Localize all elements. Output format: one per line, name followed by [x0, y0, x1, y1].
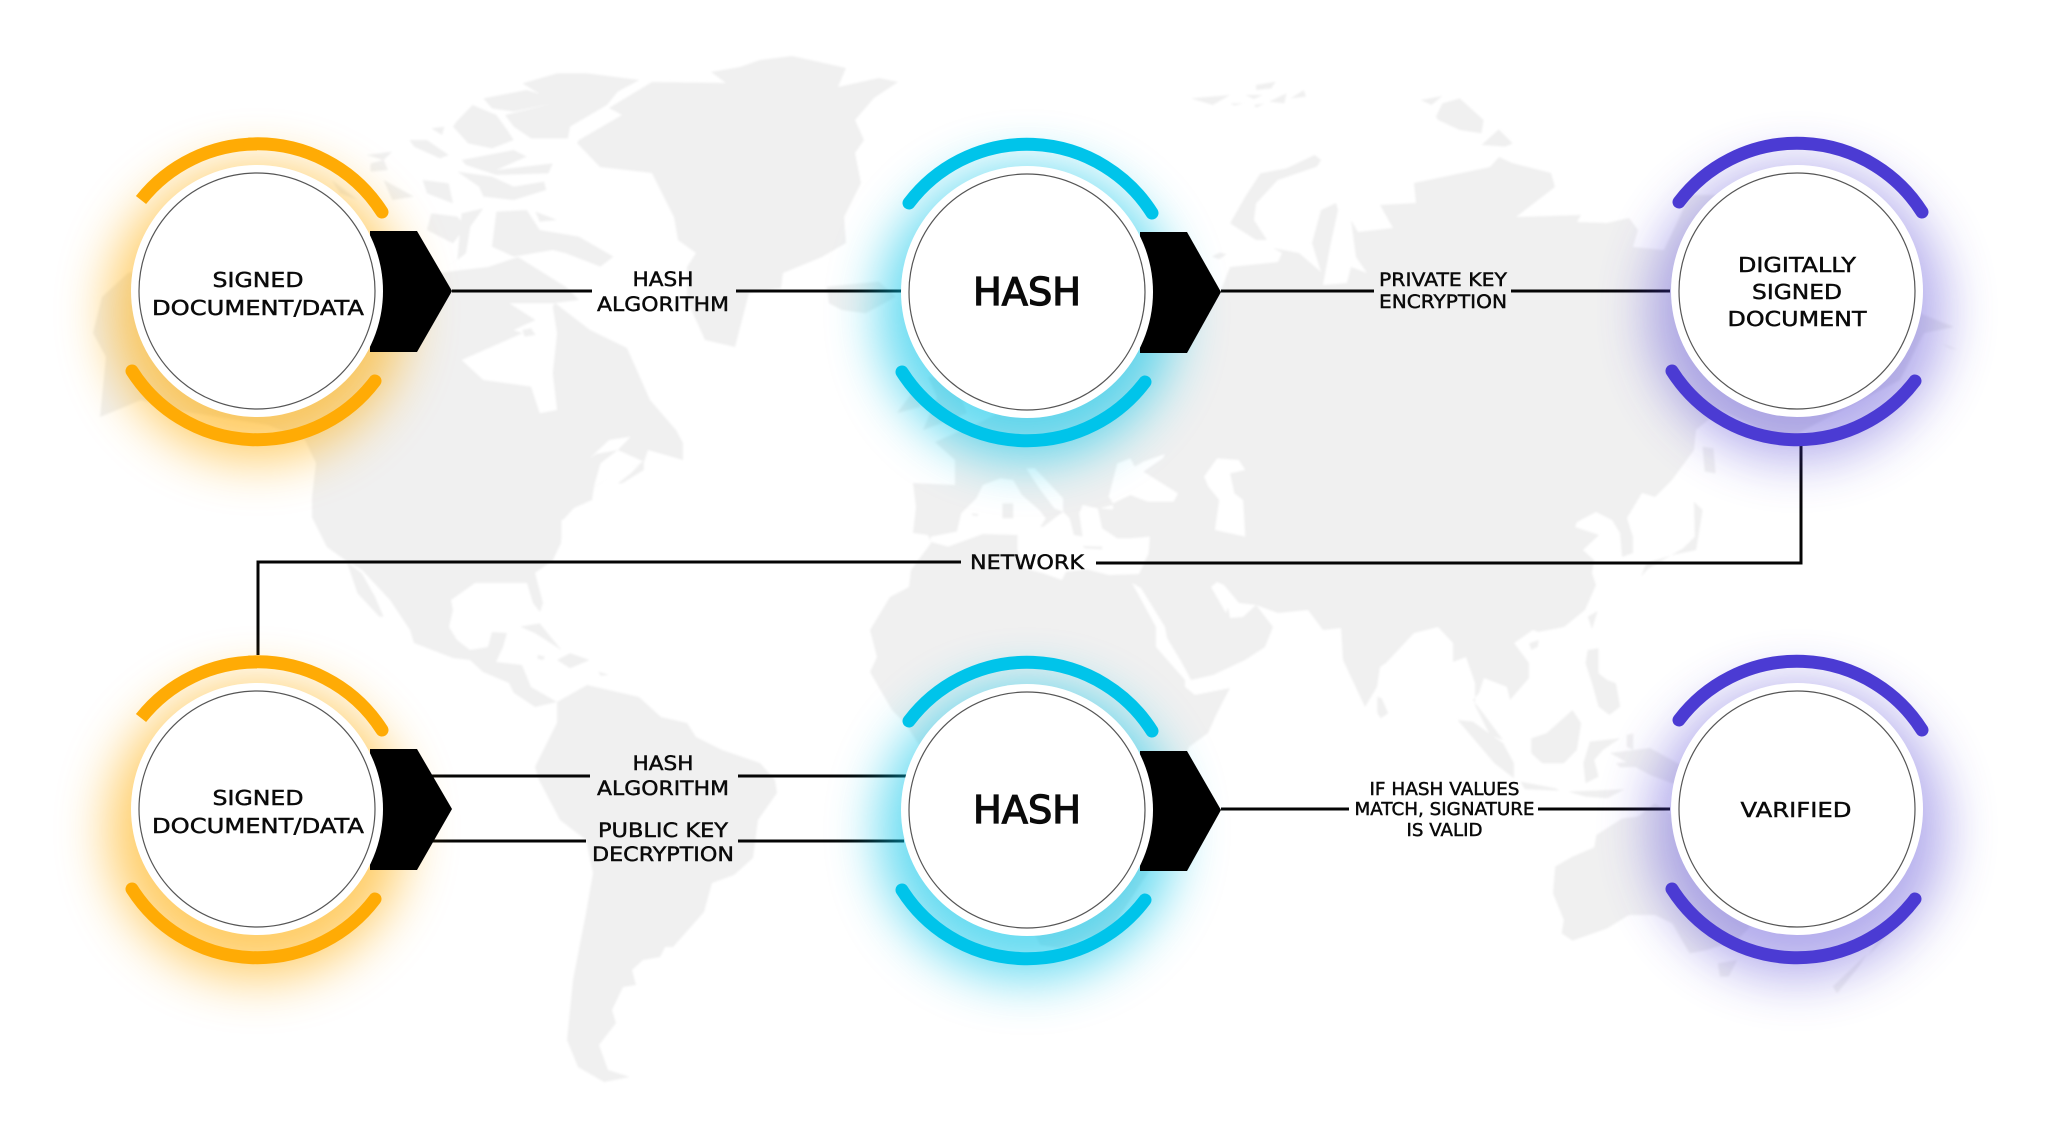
node: varified — [1649, 661, 1945, 978]
connector: public key decryption — [430, 840, 904, 842]
node: digitally signed document — [1649, 143, 1945, 460]
connector: network — [258, 438, 1801, 655]
node: signed document top: DOCUMENT/DATA — [152, 296, 364, 320]
node: hash bottom: HASH — [973, 788, 1081, 832]
label: hash values match — [1354, 780, 1534, 841]
node: signed document bottom — [109, 662, 452, 978]
connector: private key encryption — [1221, 290, 1670, 292]
node: hash bottom — [879, 662, 1221, 979]
node: hash top: HASH — [973, 270, 1081, 314]
label: private key encryption — [1379, 270, 1508, 313]
label: hash algorithm top — [597, 268, 729, 316]
label: hash algorithm bottom: ALGORITHM — [597, 777, 729, 800]
label: hash algorithm top: ALGORITHM — [597, 293, 729, 316]
label: public key decryption: PUBLIC KEY — [598, 819, 728, 842]
node: digitally signed document: SIGNED — [1752, 280, 1842, 304]
node: hash top — [879, 144, 1221, 461]
label: hash algorithm bottom: HASH — [632, 752, 694, 775]
node: varified: VARIFIED — [1740, 798, 1852, 822]
label: hash algorithm top: HASH — [632, 268, 694, 291]
label: hash values match: IS VALID — [1406, 821, 1482, 841]
node: signed document bottom: DOCUMENT/DATA — [152, 814, 364, 838]
connector: hash algorithm bottom — [430, 774, 907, 778]
label: public key decryption — [592, 819, 734, 866]
label: network: NETWORK — [970, 551, 1085, 574]
label: private key encryption: ENCRYPTION — [1379, 292, 1507, 313]
connector: verification — [1221, 808, 1670, 810]
node: signed document bottom: SIGNED — [212, 786, 304, 810]
node: digitally signed document: DIGITALLY — [1738, 253, 1857, 277]
label: private key encryption: PRIVATE KEY — [1379, 270, 1508, 291]
label: hash values match: IF HASH VALUES — [1370, 780, 1520, 800]
node: signed document top: SIGNED — [212, 268, 304, 292]
label: hash values match: MATCH, SIGNATURE — [1354, 800, 1534, 820]
node: signed document top — [109, 144, 452, 460]
connector: hash algorithm top — [452, 290, 905, 292]
node: digitally signed document: DOCUMENT — [1728, 307, 1867, 331]
label: public key decryption: DECRYPTION — [592, 843, 734, 866]
label: hash algorithm bottom — [597, 752, 729, 800]
